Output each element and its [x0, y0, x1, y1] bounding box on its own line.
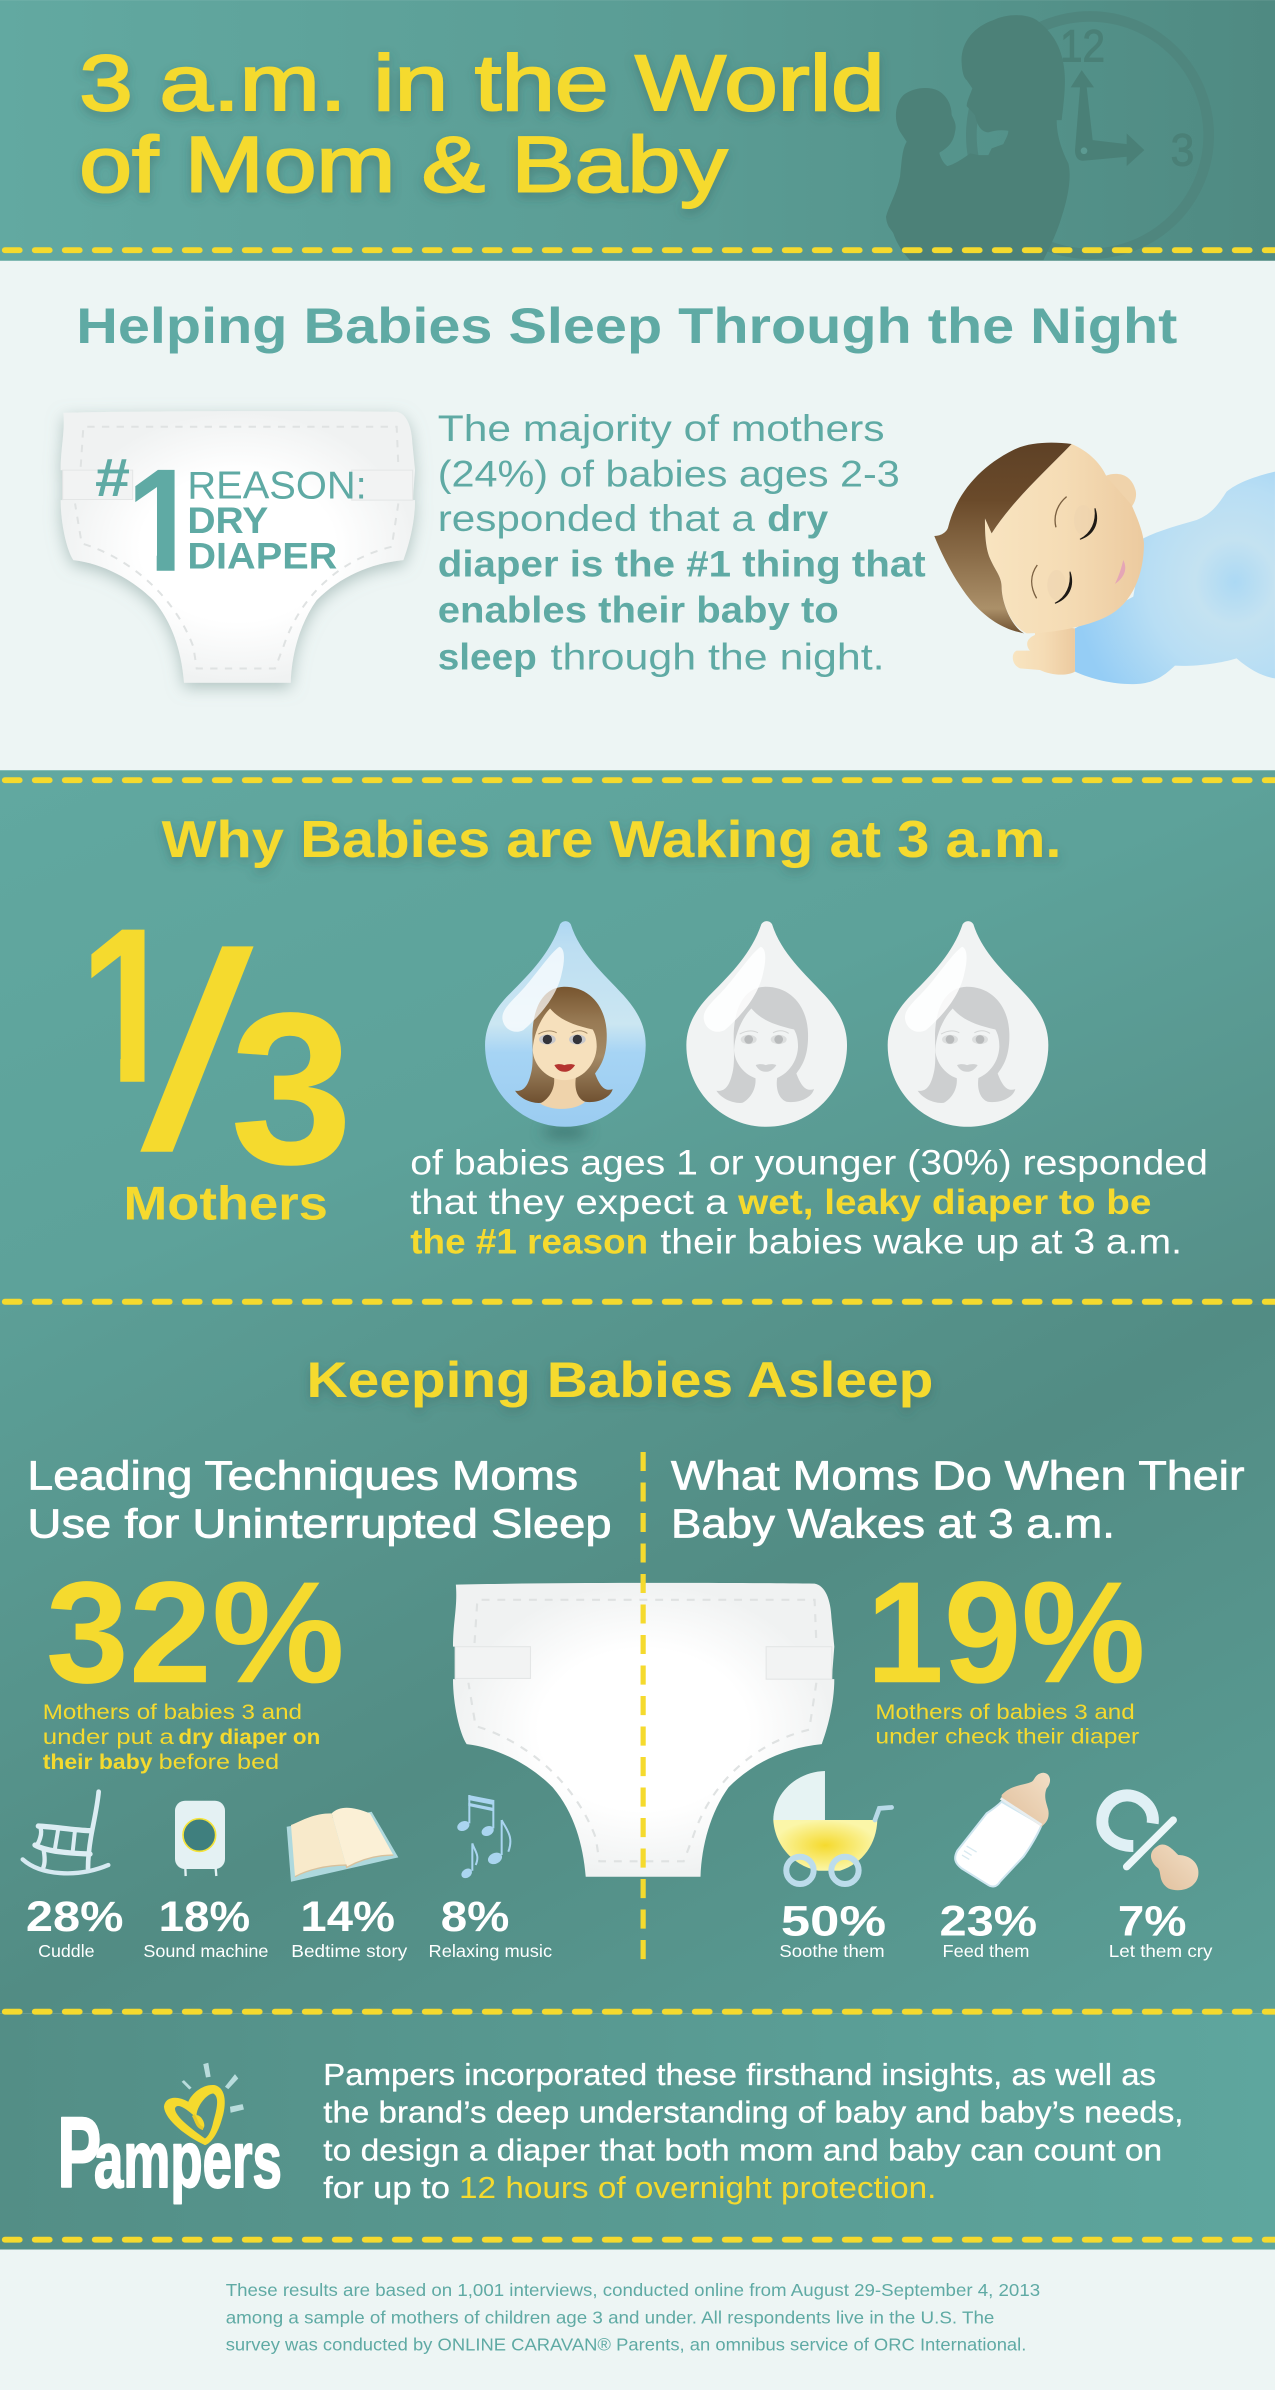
big fraction one third: / — [140, 897, 255, 1209]
subheading: what moms do: Baby Wakes at 3 a.m. — [671, 1500, 1115, 1546]
technique: cuddle: Cuddle — [38, 1941, 95, 1961]
big fraction one third — [91, 930, 345, 1166]
icon: mother and baby silhouette — [886, 15, 1070, 260]
icon: pacifier — [1102, 1795, 1198, 1890]
stat: 32 percent: 32% — [46, 1551, 345, 1713]
icon: diaper with number one reason: # — [95, 449, 130, 508]
text block: dry diaper finding: diaper is the #1 thing that — [438, 544, 926, 585]
panel: keeping babies asleep — [0, 1302, 1275, 2013]
technique: cuddle: 28% — [26, 1893, 124, 1941]
text block: dry diaper finding: through the night. — [551, 637, 885, 678]
stat: 32 percent: before bed — [159, 1750, 279, 1774]
technique: bedtime story: 14% — [300, 1893, 395, 1941]
text block: dry diaper finding: dry — [767, 498, 829, 539]
text block: survey methodology: survey was conducted by ONLINE CARAVAN® Parents, an omnibus service of ORC International. — [226, 2334, 1026, 2354]
label: mothers: Mothers — [124, 1177, 328, 1230]
response: feed them — [939, 1773, 1050, 1961]
logo: pampers: Pampers — [57, 2096, 282, 2208]
heading: Helping Babies Sleep Through the Night — [76, 297, 1178, 354]
technique: relaxing music: 8% — [441, 1893, 509, 1941]
icon: sleeping baby — [934, 443, 1275, 684]
panel: helping babies sleep — [0, 260, 1275, 696]
icon: diaper with number one reason: REASON: — [187, 463, 367, 507]
icon: sound machine — [175, 1801, 225, 1876]
icon: clock — [971, 16, 1209, 254]
text block: dry diaper finding: (24%) of babies ages 2-3 — [438, 454, 900, 495]
technique: relaxing music — [429, 1795, 552, 1961]
icon: diaper with number one reason: 1 — [126, 439, 199, 603]
text block: overnight protection: the brand’s deep understanding of baby and baby’s needs, — [323, 2095, 1183, 2129]
technique: bedtime story — [287, 1808, 407, 1961]
title: of Mom & Baby — [79, 119, 728, 208]
text block: one third explanation: wet, leaky diaper to be — [737, 1183, 1151, 1222]
heading: Keeping Babies Asleep — [307, 1351, 933, 1408]
big fraction one third: 1 — [79, 882, 178, 1129]
response: soothe them — [773, 1771, 892, 1961]
panel: footnote — [0, 2250, 1275, 2390]
text block: overnight protection: for up to — [323, 2171, 450, 2205]
technique: sound machine — [143, 1801, 268, 1961]
technique: bedtime story: Bedtime story — [291, 1941, 407, 1961]
text block: dry diaper finding: enables their baby to — [438, 589, 839, 630]
heading: Why Babies are Waking at 3 a.m. — [162, 810, 1061, 868]
stat: 32 percent: under put a — [43, 1725, 174, 1749]
title — [79, 38, 885, 208]
icon: highlighted mother drop — [485, 921, 646, 1137]
text block: survey methodology — [226, 2280, 1040, 2354]
text block: dry diaper finding: responded that a — [438, 498, 756, 539]
stat: 32 percent: dry diaper on — [178, 1725, 320, 1749]
technique: sound machine: 18% — [159, 1893, 250, 1941]
text block: one third explanation: the #1 reason — [410, 1223, 648, 1262]
subheading: leading techniques: Leading Techniques Moms — [27, 1452, 578, 1498]
text block: one third explanation: of babies ages 1 or younger (30%) responded — [410, 1143, 1208, 1182]
technique: sound machine: Sound machine — [143, 1941, 268, 1961]
text block: one third explanation: that they expect a — [410, 1183, 728, 1222]
stat: 19 percent: under check their diaper — [875, 1724, 1139, 1748]
technique: relaxing music: Relaxing music — [429, 1941, 552, 1961]
stat: 32 percent — [43, 1551, 345, 1774]
stat: 32 percent: Mothers of babies 3 and — [43, 1700, 302, 1724]
response: let them cry: Let them cry — [1109, 1941, 1213, 1961]
icon: diaper with number one reason: DRY — [187, 499, 268, 541]
icon: diaper with number one reason: DIAPER — [187, 534, 337, 576]
text block: survey methodology: among a sample of mothers of children age 3 and under. All respondents live in the U.S. The — [226, 2308, 994, 2328]
icon: rocking chair — [23, 1792, 108, 1873]
text block: one third explanation — [410, 1143, 1208, 1262]
stat: 19 percent: Mothers of babies 3 and — [875, 1700, 1135, 1724]
stat: 19 percent: 19% — [866, 1551, 1145, 1713]
icon: clock: 12 — [1060, 21, 1105, 72]
icon: book — [287, 1808, 398, 1882]
response: soothe them: 50% — [781, 1897, 886, 1945]
response: feed them: 23% — [939, 1897, 1037, 1945]
response: let them cry — [1102, 1795, 1213, 1961]
icon: clock: 3 — [1171, 125, 1194, 176]
text block: one third explanation: their babies wake up at 3 a.m. — [660, 1223, 1182, 1262]
panel: header — [0, 0, 1275, 261]
icon: grey mother drop — [686, 921, 847, 1127]
title: 3 a.m. in the World — [79, 38, 885, 127]
big fraction one third: 3 — [230, 967, 353, 1209]
text block: dry diaper finding: The majority of mothers — [438, 408, 885, 449]
subheading: what moms do — [671, 1452, 1245, 1546]
response: soothe them: Soothe them — [779, 1941, 885, 1961]
subheading: what moms do: What Moms Do When Their — [671, 1452, 1245, 1498]
icon: stroller — [773, 1771, 892, 1884]
panel: pampers statement — [0, 2012, 1275, 2250]
text block: dry diaper finding — [438, 408, 926, 678]
icon: large diaper — [453, 1583, 834, 1877]
icon: diaper with number one reason — [61, 411, 415, 683]
text block: overnight protection: 12 hours of overnight protection. — [459, 2171, 936, 2205]
text block: overnight protection — [323, 2058, 1183, 2205]
response: let them cry: 7% — [1118, 1897, 1187, 1945]
subheading: leading techniques — [27, 1452, 612, 1546]
subheading: leading techniques: Use for Uninterrupted Sleep — [27, 1500, 612, 1546]
stat: 32 percent: their baby — [43, 1750, 153, 1774]
text block: survey methodology: These results are based on 1,001 interviews, conducted online from August 29-September 4, 2013 — [226, 2280, 1040, 2300]
panel: why babies wake — [0, 770, 1275, 1304]
icon: baby bottle — [955, 1773, 1050, 1887]
text block: overnight protection: to design a diaper that both mom and baby can count on — [323, 2133, 1162, 2167]
icon: music notes — [456, 1795, 510, 1880]
technique: cuddle — [23, 1792, 124, 1961]
icon: grey mother drop — [888, 921, 1048, 1127]
text block: dry diaper finding: sleep — [438, 637, 537, 678]
text block: overnight protection: Pampers incorporated these firsthand insights, as well as — [323, 2058, 1156, 2092]
response: feed them: Feed them — [943, 1941, 1029, 1961]
